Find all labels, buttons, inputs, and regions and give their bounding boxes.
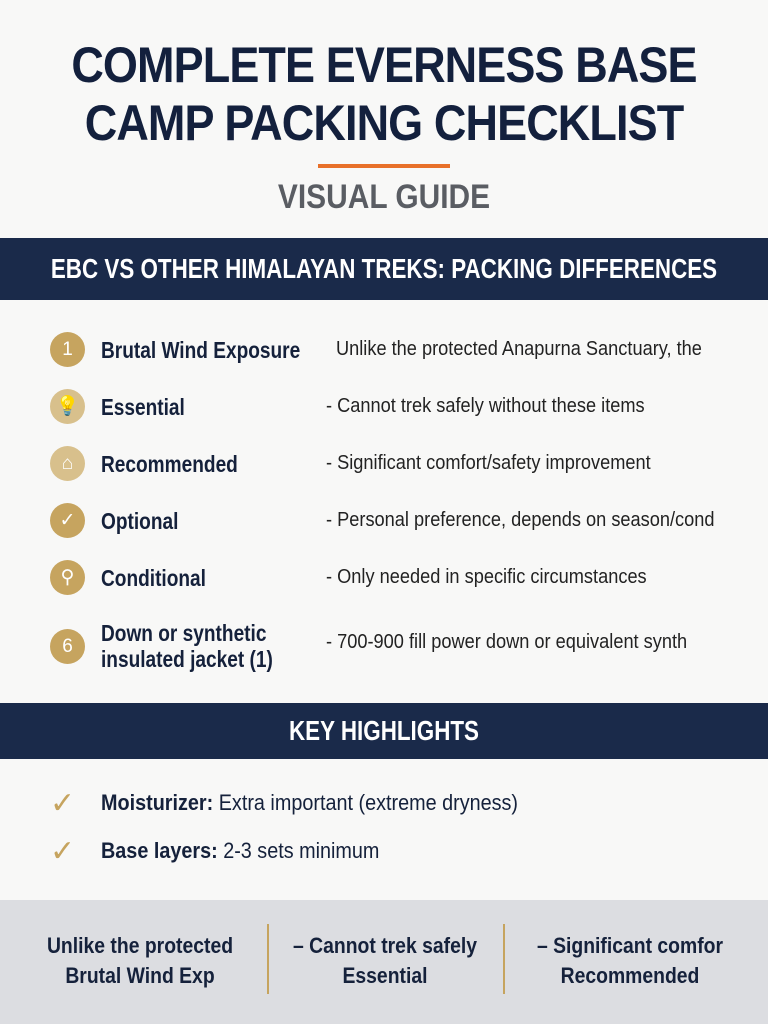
- row 5: Conditional: [101, 565, 206, 591]
- footer col 3: – Significant comfor: [537, 933, 723, 958]
- text: Base layers: 2-3 sets minimum: [101, 838, 379, 863]
- row 6: insulated jacket (1): [101, 646, 273, 672]
- footer col 1: Unlike the protected: [47, 933, 233, 958]
- footer col 1: [47, 933, 233, 988]
- highlight 1: ✓: [50, 787, 75, 820]
- row 3: - Significant comfort/safety improvement: [326, 452, 651, 474]
- row 2: Essential: [101, 394, 185, 420]
- footer col 2: Essential: [342, 963, 428, 988]
- row 1: Unlike the protected Anapurna Sanctuary, the: [336, 338, 702, 360]
- row 4: Optional: [101, 508, 178, 534]
- row 5: [50, 560, 647, 595]
- highlight 2: [50, 835, 379, 868]
- row 3: Recommended: [101, 451, 238, 477]
- footer band: [0, 900, 768, 1024]
- footer col 2: [293, 933, 477, 988]
- row 4: - Personal preference, depends on season/cond: [326, 509, 715, 531]
- section header: packing differences: [0, 238, 768, 300]
- row 5: - Only needed in specific circumstances: [326, 566, 647, 588]
- accent bar: [318, 164, 450, 168]
- section header: key highlights: KEY HIGHLIGHTS: [289, 715, 479, 746]
- row 6: - 700-900 fill power down or equivalent synth: [326, 631, 687, 653]
- row 6: 6: [62, 636, 73, 657]
- row 1: 1: [62, 339, 73, 360]
- title: COMPLETE EVERNESS BASE: [71, 37, 697, 93]
- highlight 2: ✓: [50, 835, 75, 868]
- section header: key highlights: [0, 703, 768, 759]
- row 2: 💡: [56, 396, 79, 417]
- row 6: Down or synthetic: [101, 620, 266, 646]
- footer col 1: Brutal Wind Exp: [65, 963, 215, 988]
- row 1: [50, 332, 702, 367]
- footer col 3: [537, 933, 723, 988]
- row 1: Brutal Wind Exposure: [101, 337, 300, 363]
- row 6: [50, 620, 687, 672]
- text: Moisturizer: Extra important (extreme dryness): [101, 790, 518, 815]
- subtitle: VISUAL GUIDE: [278, 178, 490, 216]
- footer col 3: Recommended: [561, 963, 699, 988]
- title: CAMP PACKING CHECKLIST: [85, 95, 683, 151]
- row 2: [50, 389, 645, 424]
- row 4: ✓: [60, 510, 75, 531]
- list: categories: [50, 332, 715, 672]
- footer col 2: – Cannot trek safely: [293, 933, 477, 958]
- title: [71, 37, 697, 151]
- row 5: ⚲: [61, 567, 74, 588]
- row 3: ⌂: [62, 453, 73, 474]
- highlight 1: [50, 787, 518, 820]
- row 3: [50, 446, 651, 481]
- section header: packing differences: EBC VS OTHER HIMALAYAN TREKS: PACKING DIFFERENCES: [51, 253, 717, 284]
- row 4: [50, 503, 715, 538]
- row 2: - Cannot trek safely without these items: [326, 395, 645, 417]
